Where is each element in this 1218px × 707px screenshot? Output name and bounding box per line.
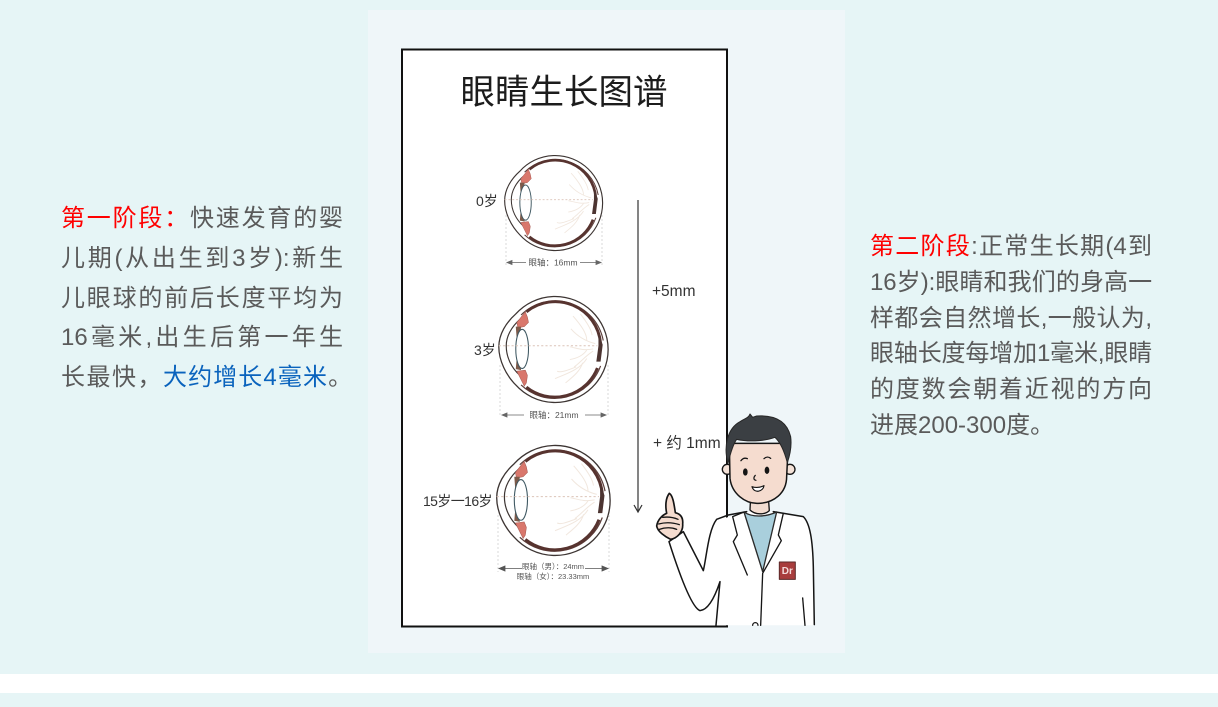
pocket button (753, 623, 758, 625)
lapels (733, 512, 805, 625)
eye: age 0: 0岁 (476, 193, 498, 209)
text block: stage two: 眼轴长度每增加1毫米,眼睛 (870, 340, 1152, 367)
face (729, 443, 788, 503)
eye: age 3: 3岁 (474, 342, 496, 358)
badge (779, 562, 795, 579)
text block: stage two: 第二阶段:正常生长期(4到 (870, 233, 1152, 260)
text block: stage one: 儿眼球的前后长度平均为 (61, 285, 343, 312)
neck (750, 497, 769, 514)
coat fill (670, 512, 814, 625)
text block: stage two (870, 233, 1152, 439)
text block: stage one (61, 205, 352, 391)
eyes (743, 468, 748, 476)
hand (657, 493, 683, 539)
white strip near page bottom (0, 674, 1218, 693)
eye: age 0: 眼轴：16mm (528, 258, 578, 268)
text block: stage two: 进展200-300度。 (870, 412, 1054, 439)
text block: stage two: 16岁):眼睛和我们的身高一 (870, 269, 1152, 296)
label: plus about 1mm: + 约 1mm (653, 434, 721, 452)
eye: age 15 to 16: 眼轴（女）：23.33mm (517, 571, 589, 581)
eye: age 15 to 16: 15岁一16岁 (423, 493, 492, 509)
eye: age 15 to 16 (423, 445, 610, 581)
text block: stage one: 16毫米,出生后第一年生 (61, 324, 343, 351)
coat outline (669, 512, 814, 625)
illustration: doctor: Dr (782, 566, 793, 577)
eye: age 3: 眼轴：21mm (529, 410, 579, 420)
mouth (752, 486, 764, 491)
text block: stage one: 儿期(从出生到3岁):新生 (61, 245, 343, 272)
hair (726, 414, 791, 463)
shirt (744, 512, 777, 572)
label: plus 5mm: +5mm (652, 283, 696, 300)
nose (754, 475, 756, 480)
eye: age 15 to 16: 眼轴（男）：24mm (522, 561, 584, 571)
illustration: doctor (657, 414, 814, 625)
chart frame (402, 50, 727, 626)
text block: stage two: 样都会自然增长,一般认为, (870, 305, 1152, 332)
chart title: 眼睛生长图谱 (460, 74, 668, 112)
eye: age 0 (476, 156, 603, 268)
arrow: growth direction (634, 200, 642, 512)
eyebrows (741, 457, 771, 461)
text block: stage two: 的度数会朝着近视的方向 (870, 376, 1152, 403)
text block: stage one: 长最快，大约增长4毫米。 (61, 364, 352, 391)
panel background (368, 10, 845, 653)
eye: age 3 (474, 296, 608, 420)
text block: stage one: 第一阶段：快速发育的婴 (61, 205, 343, 232)
ears (722, 464, 732, 474)
